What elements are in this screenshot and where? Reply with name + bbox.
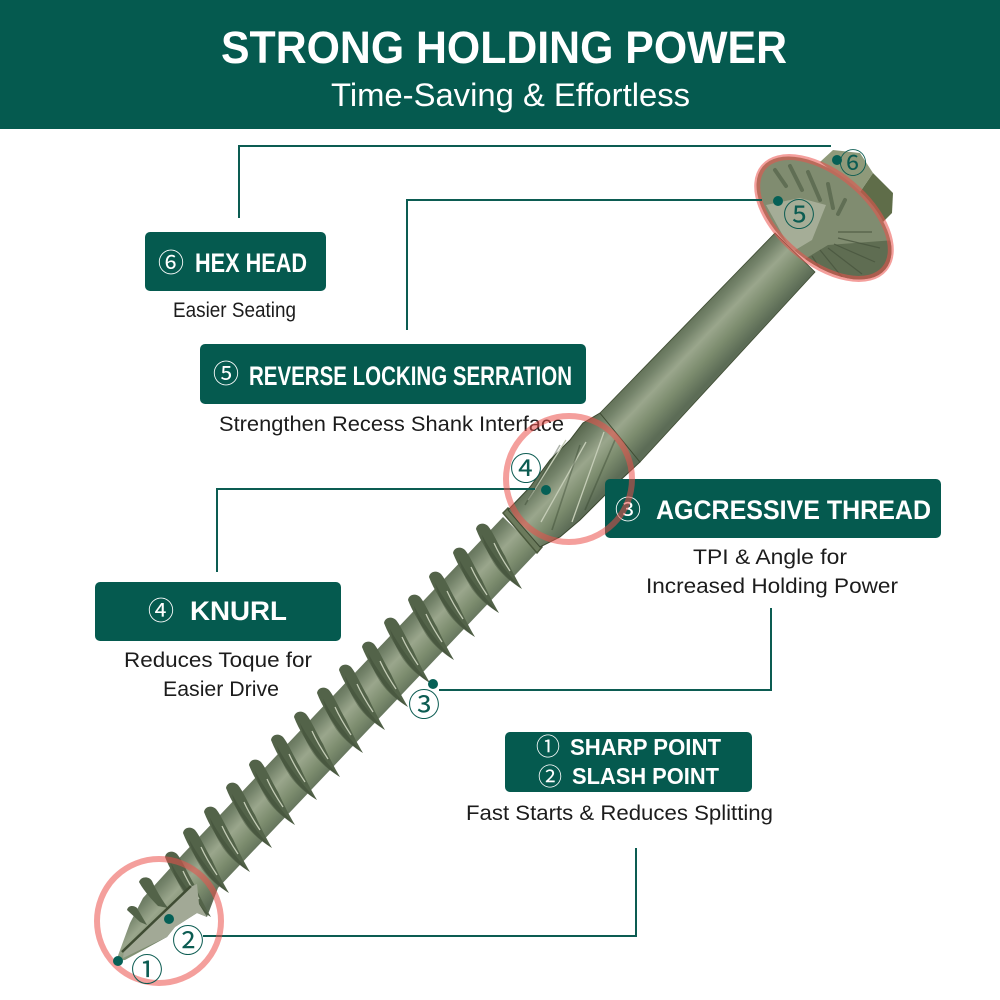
label: knurl: ④	[148, 591, 174, 628]
screw: knurl	[508, 413, 640, 547]
label: aggressive thread: ③	[615, 490, 641, 527]
text: thread description	[646, 546, 898, 598]
label: knurl	[95, 582, 341, 641]
text: knurl description: Reduces Toque for	[124, 649, 312, 672]
screw illustration	[116, 133, 914, 961]
text: knurl description	[124, 649, 312, 701]
screw: hex head	[820, 150, 893, 222]
marker 6: ⑥	[839, 142, 867, 182]
screw: threads	[127, 524, 522, 925]
text: knurl description: Easier Drive	[163, 678, 279, 701]
marker 5: ⑤	[783, 190, 815, 236]
screw: slash point	[122, 884, 207, 958]
screw: threaded core	[116, 517, 538, 961]
marker 4: ④	[510, 444, 542, 490]
text: strengthen: Strengthen Recess Shank Interface	[219, 413, 564, 436]
label: knurl: KNURL	[190, 596, 287, 626]
label: reverse locking serration: ⑤	[213, 354, 239, 391]
leader line: hex head	[239, 146, 831, 218]
screw: smooth shank	[600, 233, 815, 462]
label: aggressive thread	[605, 479, 941, 538]
leader line: knurl	[217, 489, 535, 572]
subtitle: Time-Saving & Effortless	[331, 77, 690, 113]
leader line: thread	[439, 608, 771, 690]
header banner	[0, 0, 1000, 129]
label: reverse locking serration	[200, 344, 586, 404]
label: sharp and slash point: SHARP POINT	[570, 734, 721, 760]
label: hex head: ⑥	[158, 243, 184, 280]
label: hex head	[145, 232, 326, 291]
marker 2: ②	[172, 916, 204, 962]
callout ring: knurl	[506, 416, 632, 542]
label: sharp and slash point: ②	[538, 757, 562, 792]
label: sharp and slash point: SLASH POINT	[572, 763, 719, 789]
leader line: points	[203, 848, 636, 936]
callout ring: head	[735, 134, 913, 302]
label: sharp and slash point	[505, 727, 752, 792]
title: STRONG HOLDING POWER	[221, 22, 787, 73]
text: points description: Fast Starts & Reduces Splitting	[466, 802, 773, 825]
marker 1	[113, 945, 163, 991]
screw: collar	[503, 508, 542, 553]
screw: serrated flange	[754, 154, 894, 282]
text: thread description: TPI & Angle for	[693, 546, 847, 569]
callout ring: tip	[97, 859, 221, 983]
text: easier seating: Easier Seating	[173, 299, 296, 322]
marker 1: ①	[131, 945, 163, 991]
text: thread description: Increased Holding Power	[646, 575, 898, 598]
label: aggressive thread: AGCRESSIVE THREAD	[656, 495, 931, 525]
label: hex head: HEX HEAD	[195, 248, 307, 278]
label: sharp and slash point: ①	[536, 727, 560, 762]
marker 3: ③	[408, 680, 440, 726]
leader line: serration	[407, 200, 762, 330]
label: reverse locking serration: REVERSE LOCKING SERRATION	[249, 361, 572, 391]
